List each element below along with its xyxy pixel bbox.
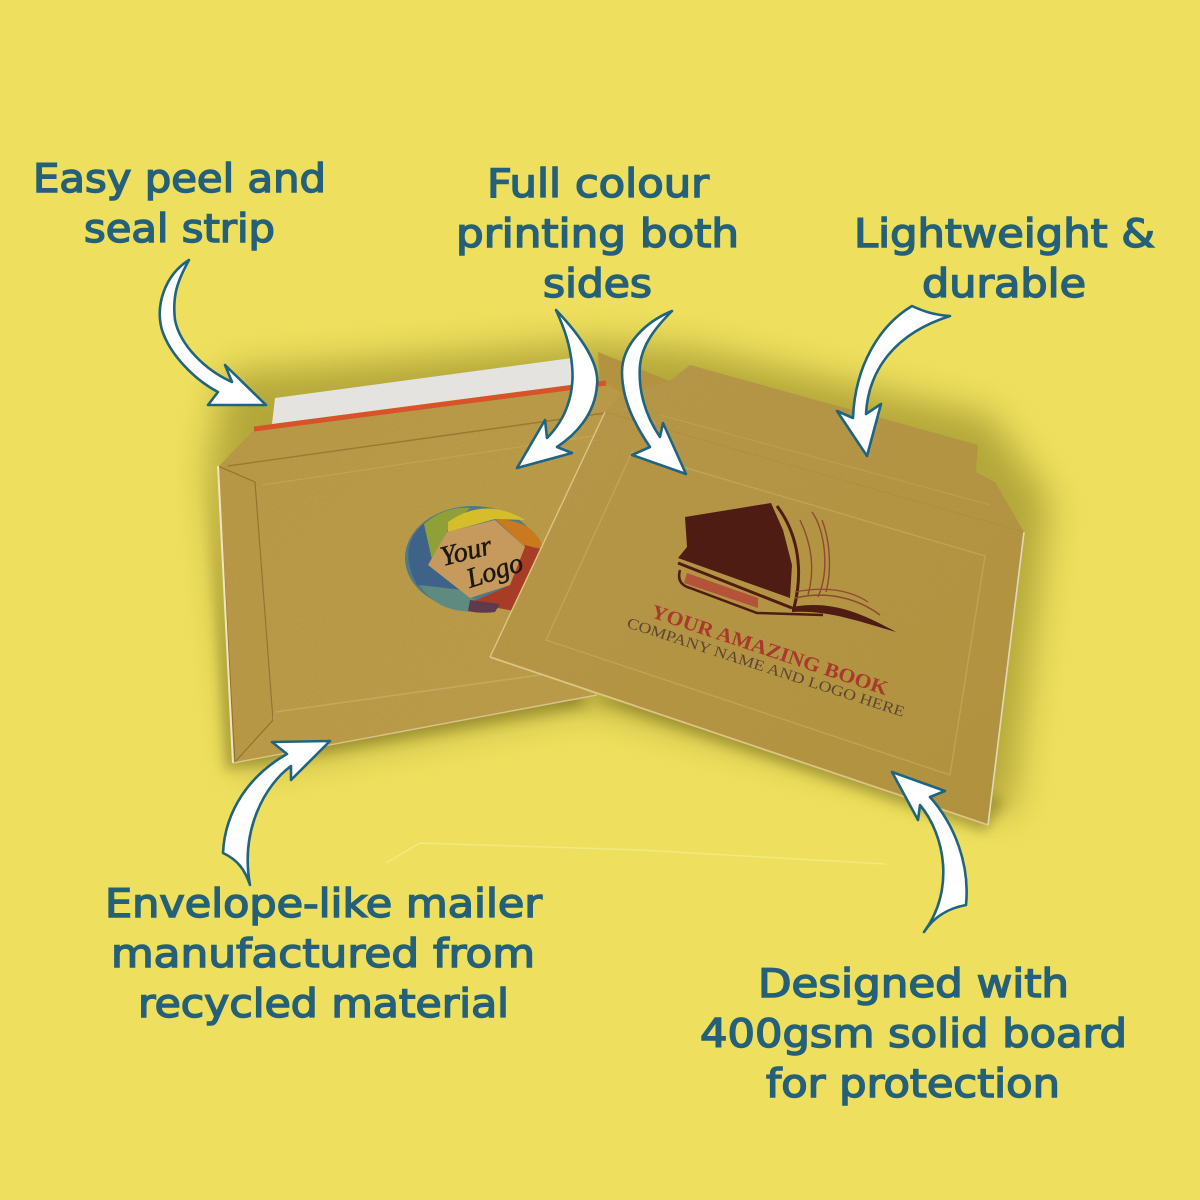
caption: printing [456,162,739,307]
caption: peel strip [33,157,326,252]
card edges [490,412,605,657]
mailer: right printed card [490,365,1024,825]
shadows behind the mailers [208,342,1050,832]
caption: solid board: 400gsm solid board [700,1012,1127,1057]
your logo mark: Logo [462,547,527,595]
caption: peel strip: seal strip [84,207,275,252]
arrow: envelope [223,741,330,885]
arrow: peel and seal [160,260,266,405]
red seal strip [254,383,606,429]
your logo mark [405,506,543,613]
caption: lightweight [854,212,1155,307]
caption: lightweight: Lightweight & [854,212,1155,257]
back sheet corner [598,352,672,396]
arrow: printing left [517,310,597,468]
top flap crease [228,413,605,466]
caption: envelope: recycled material [138,982,509,1027]
your logo mark: Your [437,530,495,573]
caption: lightweight: durable [922,262,1086,307]
caption: peel strip: Easy peel and [33,157,326,202]
left flap [218,466,273,762]
caption: printing: printing both [456,212,739,257]
arrow: lightweight [837,306,950,456]
caption: solid board: Designed with [758,962,1069,1007]
company line: COMPANY NAME AND LOGO HERE [625,616,906,721]
caption: envelope: Envelope-like mailer [105,882,543,927]
caption: printing: Full colour [487,162,710,207]
caption: envelope [105,882,543,1027]
embossed panel lines [546,452,985,775]
caption: solid board [700,962,1127,1107]
peel strip [272,358,578,424]
faint surface reflection [386,843,886,864]
card body [490,365,1024,825]
book title: YOUR AMAZING BOOK [648,601,891,700]
book logo [678,503,896,632]
embossed line [275,668,590,712]
caption: envelope: manufactured from [111,932,535,977]
arrow: printing right [622,311,686,474]
mailer: left envelope [218,352,672,763]
envelope body [220,384,625,763]
caption: solid board: for protection [766,1062,1060,1107]
arrow: solid board [892,772,967,932]
caption: printing: sides [543,262,652,307]
